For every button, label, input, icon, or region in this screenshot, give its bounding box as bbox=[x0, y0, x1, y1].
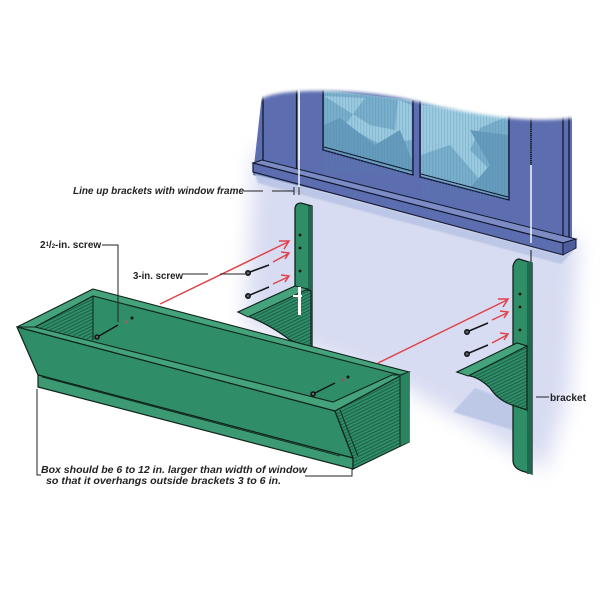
window sill bbox=[253, 160, 576, 255]
window top fade bbox=[240, 60, 600, 120]
label: box size bbox=[41, 465, 308, 487]
box front face bbox=[17, 327, 353, 458]
label: box size: so that it overhangs outside brackets 3 to 6 in. bbox=[46, 476, 281, 487]
box interior bbox=[17, 289, 409, 407]
wall background bbox=[245, 150, 578, 470]
label: box screw: / bbox=[49, 240, 52, 251]
window box bbox=[17, 289, 409, 469]
label: box size: Box should be 6 to 12 in. larger than width of window bbox=[41, 465, 308, 476]
label: wall screw: 3-in. screw bbox=[133, 271, 183, 282]
left bracket bbox=[238, 203, 312, 350]
box interior end wall bbox=[35, 296, 93, 340]
wall screws bbox=[246, 265, 488, 356]
box screws bbox=[95, 325, 335, 396]
alignment lines bbox=[299, 100, 531, 262]
box right end bbox=[335, 372, 409, 469]
red arrows bbox=[160, 241, 508, 363]
label: box screw: 2-in. screw bbox=[52, 240, 101, 251]
label: box screw: 1 bbox=[46, 242, 50, 248]
window box installation diagram bbox=[16, 88, 586, 486]
wall shadow of right bracket bbox=[453, 388, 513, 430]
box back rim bbox=[17, 289, 409, 375]
label: window frame: Line up brackets with window frame bbox=[73, 186, 244, 197]
box base trim bbox=[38, 375, 353, 469]
window frame bbox=[253, 88, 572, 238]
right bracket shelf bbox=[457, 343, 527, 410]
glass panes bbox=[324, 90, 508, 199]
leader lines bbox=[37, 187, 549, 476]
left bracket shelf bbox=[238, 286, 311, 348]
box front rim bbox=[17, 327, 403, 411]
label: box screw: 2 bbox=[40, 240, 46, 251]
right bracket bbox=[457, 259, 532, 474]
window bbox=[251, 88, 578, 256]
label: bracket: bracket bbox=[550, 393, 587, 404]
sill shadow bbox=[255, 174, 575, 264]
